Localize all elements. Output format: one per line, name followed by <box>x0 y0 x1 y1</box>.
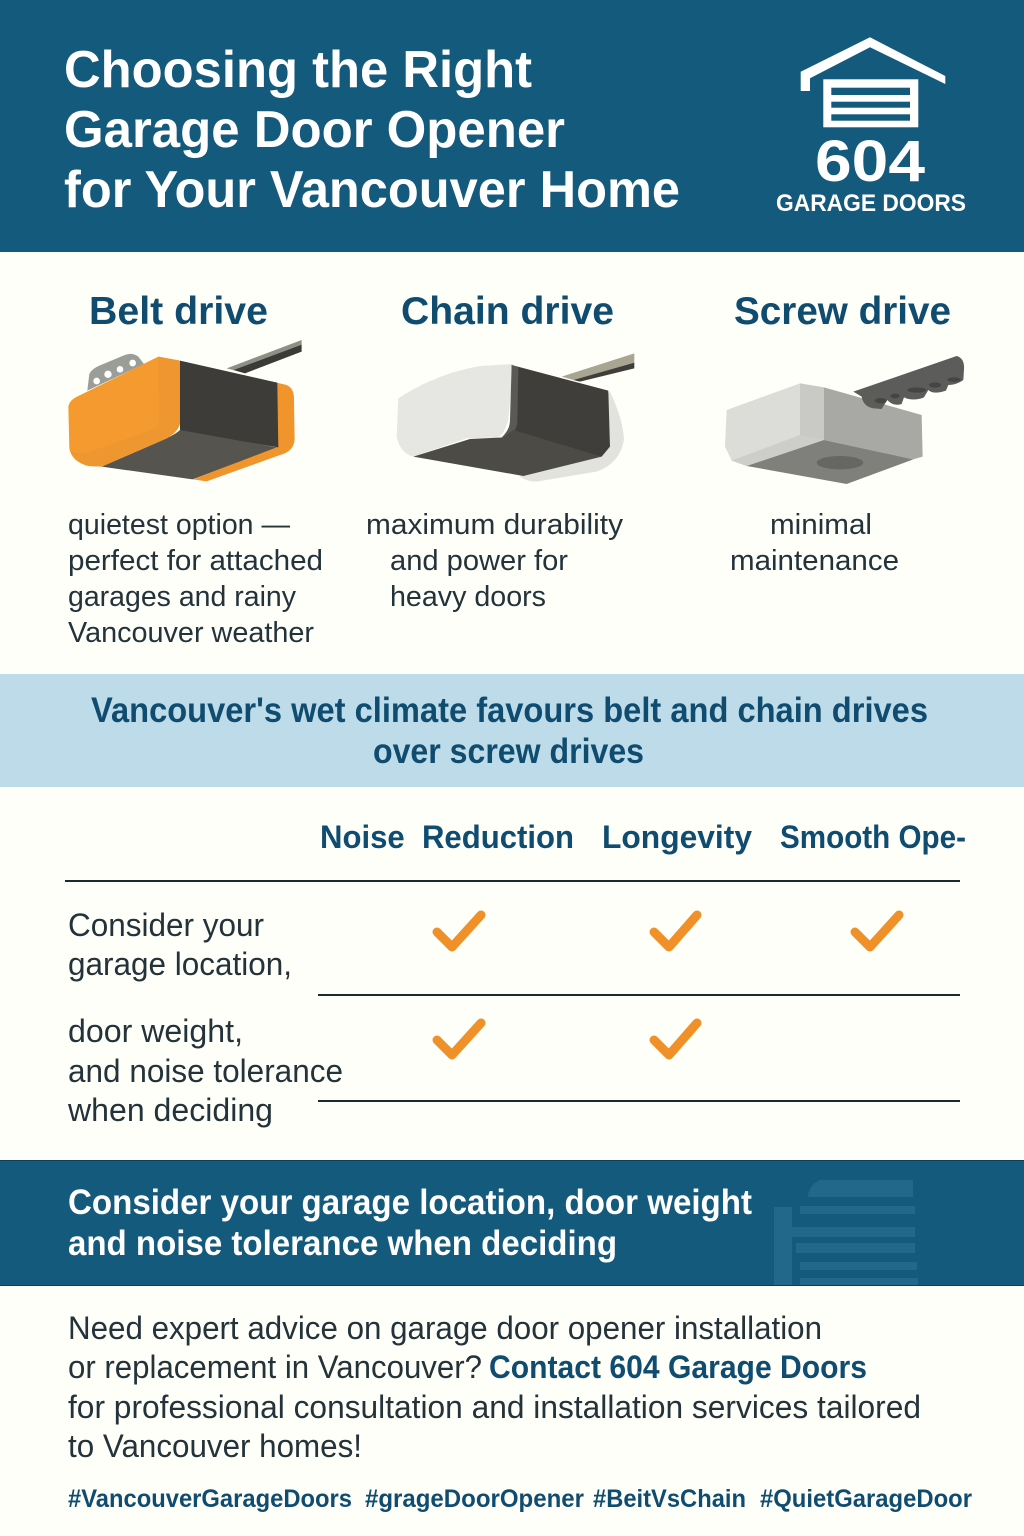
table row labels: garage location, <box>68 946 292 982</box>
logo: 604 Garage Doors: GARAGE DOORS <box>776 190 966 217</box>
description: belt drive <box>68 509 323 649</box>
icon: check marks <box>437 915 899 1055</box>
call to action text: Need expert advice on garage door opener installation <box>68 1310 822 1346</box>
title: Garage Door Opener <box>64 101 565 159</box>
icon: belt drive opener <box>68 340 302 481</box>
icon: screw drive opener <box>725 356 964 484</box>
title: for Your Vancouver Home <box>64 161 680 219</box>
table column headers: Noise Reduction <box>320 819 574 855</box>
table column headers: Longevity <box>602 819 752 855</box>
description: chain drive: heavy doors <box>390 581 546 613</box>
climate callout band: over screw drives <box>373 732 644 771</box>
hashtags: #VancouverGarageDoors <box>68 1485 352 1513</box>
logo: 604 Garage Doors: 604 <box>815 129 925 194</box>
table row labels: when deciding <box>67 1092 273 1128</box>
description: belt drive: perfect for attached <box>68 545 323 577</box>
description: chain drive <box>366 509 624 613</box>
description: screw drive <box>730 509 899 577</box>
icon: chain drive opener <box>397 353 634 482</box>
table column headers <box>320 819 966 855</box>
icon: faint garage door watermark <box>774 1180 918 1285</box>
call to action text: Contact 604 Garage Doors <box>489 1349 867 1385</box>
call to action text: for professional consultation and installation services tailored <box>68 1389 921 1425</box>
panel: belt drive <box>68 290 323 649</box>
heading: screw drive: Screw drive <box>734 290 951 333</box>
climate callout band <box>0 674 1024 787</box>
table row labels: and noise tolerance <box>68 1053 343 1089</box>
table row labels <box>67 907 343 1128</box>
hashtags: #grageDoorOpener <box>365 1485 584 1513</box>
heading: chain drive: Chain drive <box>401 290 614 333</box>
hashtags: #QuietGarageDoor <box>760 1485 972 1513</box>
climate callout band: Vancouver's wet climate favours belt and chain drives <box>91 691 928 730</box>
hashtags <box>68 1485 972 1513</box>
table row labels: door weight, <box>68 1013 243 1049</box>
logo: 604 Garage Doors <box>776 37 966 217</box>
header banner <box>0 0 1024 252</box>
call to action text: to Vancouver homes! <box>68 1428 362 1464</box>
title <box>64 41 680 219</box>
heading: belt drive: Belt drive <box>89 290 268 333</box>
description: belt drive: garages and rainy <box>68 581 296 613</box>
banner text: Consider your garage location, door weight <box>68 1183 752 1222</box>
table row labels: Consider your <box>68 907 264 943</box>
title: Choosing the Right <box>64 41 532 99</box>
description: screw drive: minimal <box>770 509 872 541</box>
description: screw drive: maintenance <box>730 545 899 577</box>
description: chain drive: maximum durability <box>366 509 624 541</box>
panel: chain drive <box>366 290 634 613</box>
panel: screw drive <box>725 290 964 577</box>
banner text: and noise tolerance when deciding <box>68 1224 617 1263</box>
description: chain drive: and power for <box>390 545 568 577</box>
table column headers: Smooth Ope- <box>780 819 966 855</box>
call to action text: or replacement in Vancouver? <box>68 1349 482 1385</box>
description: belt drive: Vancouver weather <box>68 617 314 649</box>
call to action text <box>68 1310 921 1464</box>
description: belt drive: quietest option — <box>68 509 290 541</box>
comparison table <box>65 819 966 1128</box>
bottom advice banner <box>0 1160 1024 1286</box>
hashtags: #BeitVsChain <box>593 1485 746 1513</box>
banner text <box>68 1183 752 1263</box>
